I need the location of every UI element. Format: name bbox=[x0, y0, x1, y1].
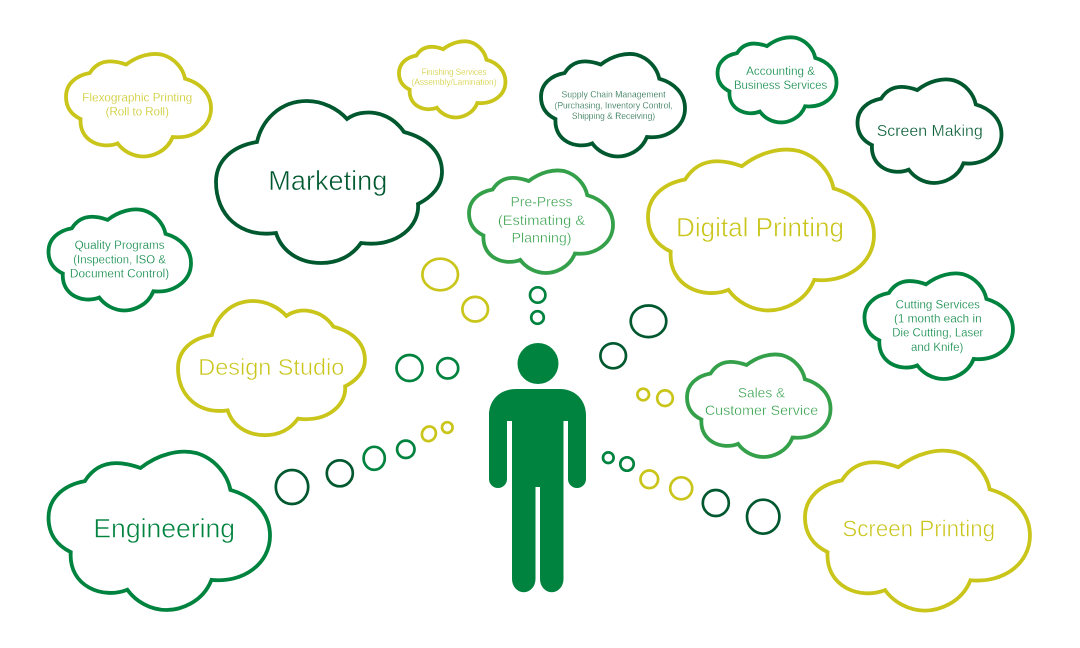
cloud: Pre-Press: (Estimating & bbox=[498, 212, 586, 228]
cloud: Pre-Press: Pre-Press bbox=[510, 194, 572, 210]
cloud: Cutting Services: (1 month each in bbox=[894, 311, 982, 325]
cloud: Cutting Services bbox=[864, 273, 1013, 379]
cloud: Quality Programs bbox=[49, 209, 191, 310]
cloud: Sales & Customer Service: Customer Service bbox=[705, 402, 818, 418]
cloud: Quality Programs: (Inspection, ISO & bbox=[73, 254, 166, 266]
cloud: Supply Chain Management: (Purchasing, Inventory Control, bbox=[554, 100, 672, 111]
cloud: Cutting Services: Cutting Services bbox=[896, 297, 980, 311]
cloud: Supply Chain Management: Shipping & Receiving) bbox=[572, 111, 655, 122]
cloud: Supply Chain Management bbox=[541, 54, 685, 156]
icon: person bbox=[489, 343, 586, 592]
cloud: Finishing Services: Finishing Services bbox=[422, 67, 487, 77]
cloud: Engineering bbox=[49, 452, 270, 610]
cloud: Pre-Press bbox=[469, 170, 613, 273]
cloud: Flexographic Printing: Flexographic Printing bbox=[82, 91, 192, 105]
cloud: Engineering: Engineering bbox=[93, 513, 235, 543]
thought bubbles: toward Pre-Press bbox=[530, 287, 545, 324]
cloud: Pre-Press: Planning) bbox=[512, 229, 572, 245]
cloud: Sales & Customer Service: Sales & bbox=[738, 384, 786, 400]
cloud: Design Studio bbox=[178, 301, 365, 435]
cloud: Accounting & Business Services bbox=[718, 37, 837, 122]
thought bubbles: toward Design Studio bbox=[396, 355, 458, 381]
cloud: Finishing Services: (Assembly/Lamination) bbox=[412, 77, 496, 87]
cloud: Finishing Services bbox=[399, 41, 505, 117]
thought bubbles: toward Sales bbox=[637, 389, 673, 406]
thought bubbles: toward Marketing bbox=[422, 259, 488, 322]
cloud: Accounting & Business Services: Business Services bbox=[734, 80, 827, 92]
cloud: Screen Printing bbox=[805, 451, 1030, 611]
cloud: Quality Programs: Quality Programs bbox=[75, 240, 165, 252]
cloud: Sales & Customer Service bbox=[687, 354, 831, 457]
cloud: Accounting & Business Services: Accounting & bbox=[746, 66, 815, 78]
cloud: Quality Programs: Document Control) bbox=[70, 269, 169, 281]
thought bubbles: toward Screen Printing bbox=[603, 452, 779, 534]
cloud: Cutting Services: and Knife) bbox=[911, 340, 963, 354]
cloud: Screen Making bbox=[858, 79, 1002, 183]
cloud: Marketing: Marketing bbox=[268, 165, 387, 196]
thought bubbles: toward Digital Printing bbox=[600, 306, 666, 368]
cloud: Screen Printing: Screen Printing bbox=[842, 516, 995, 542]
cloud: Marketing bbox=[216, 101, 442, 263]
cloud: Digital Printing bbox=[648, 150, 874, 310]
thought bubbles: toward Engineering bbox=[276, 422, 453, 504]
cloud: Design Studio: Design Studio bbox=[198, 354, 344, 380]
cloud: Cutting Services: Die Cutting, Laser bbox=[892, 326, 983, 340]
cloud: Flexographic Printing: (Roll to Roll) bbox=[106, 105, 169, 119]
cloud: Digital Printing: Digital Printing bbox=[676, 213, 844, 243]
cloud: Supply Chain Management: Supply Chain Management bbox=[562, 90, 666, 101]
cloud: Flexographic Printing bbox=[66, 54, 211, 156]
cloud: Screen Making: Screen Making bbox=[877, 123, 983, 140]
